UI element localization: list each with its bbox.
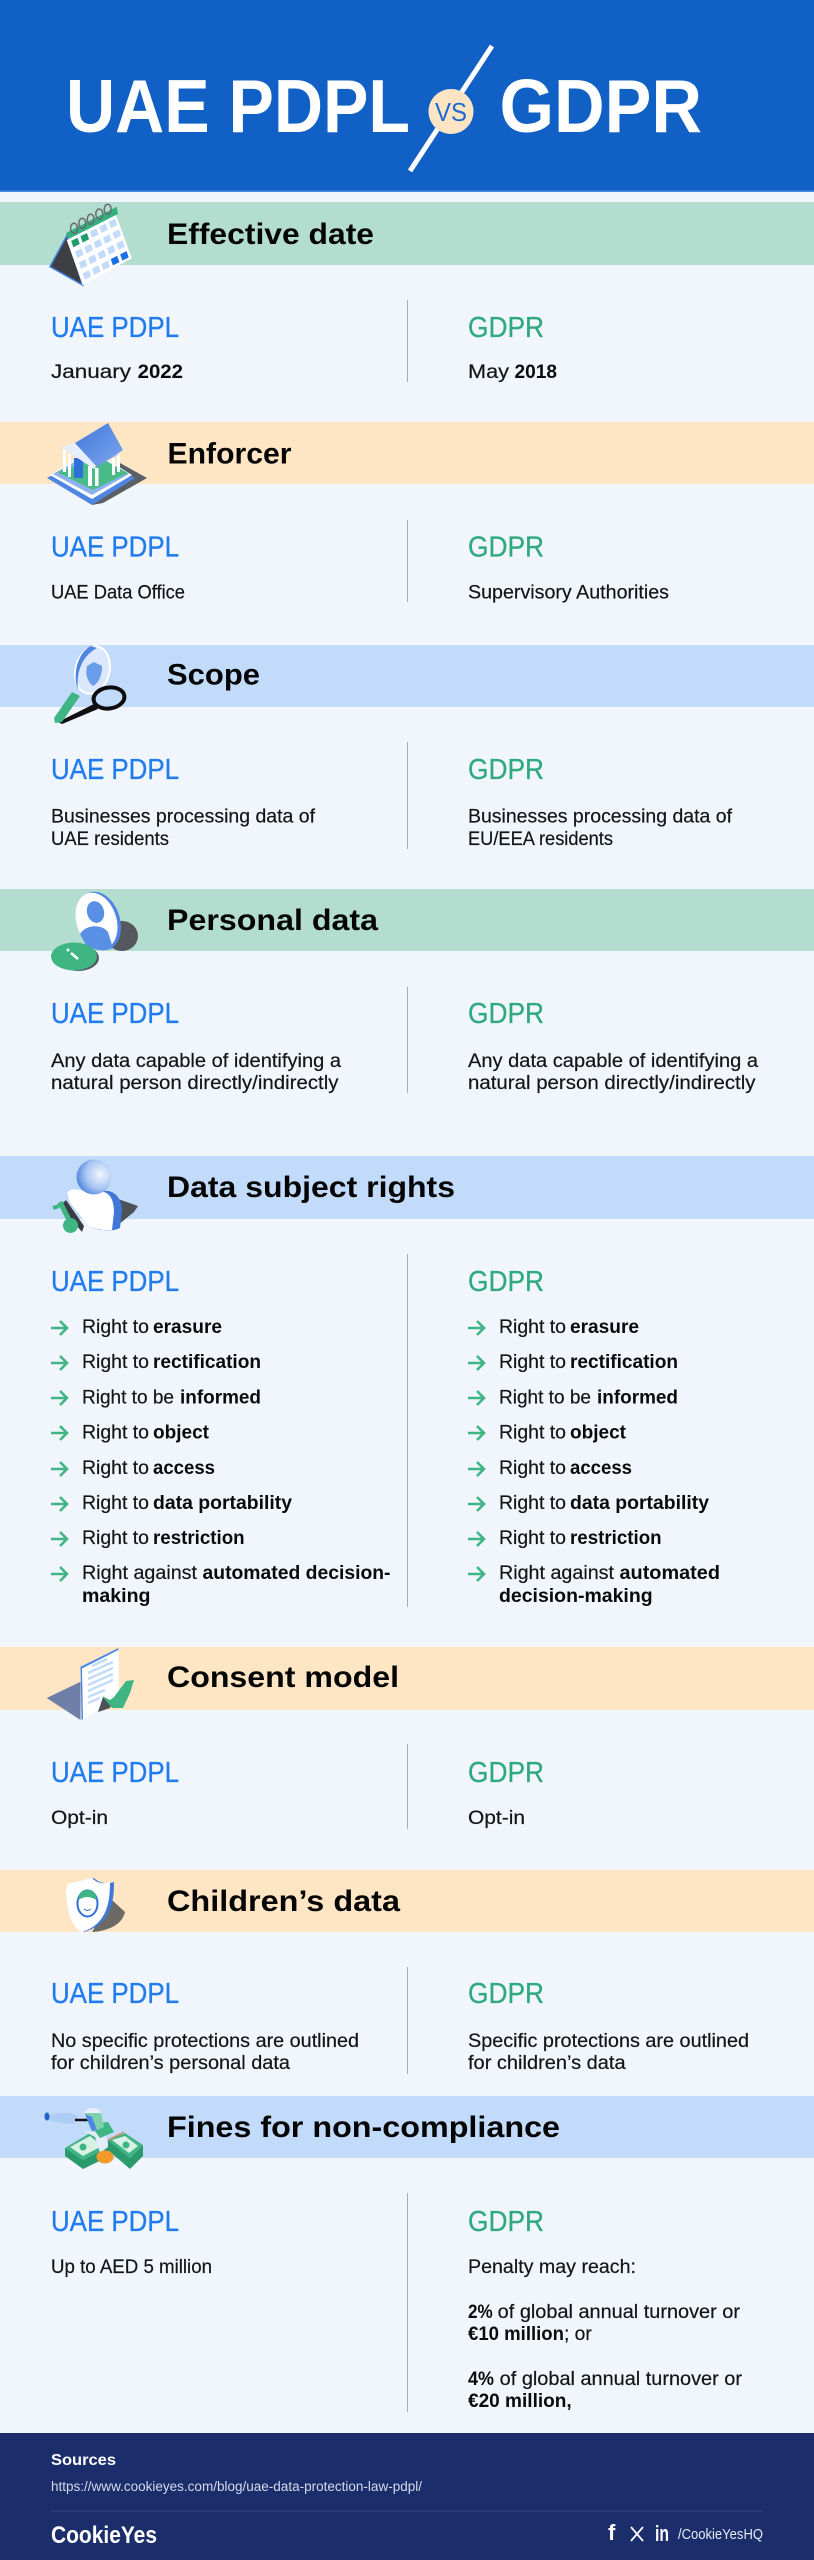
- column: UAE PDPL rights list: [51, 1266, 390, 1607]
- column: UAE PDPL: UAE PDPL: [51, 754, 179, 786]
- column: GDPR: GDPR: [468, 754, 544, 786]
- section heading: Consent model: [167, 1661, 399, 1694]
- column divider: [406, 1744, 408, 1829]
- social icons and handle: [608, 2520, 763, 2546]
- column: UAE PDPL: Opt-in: [51, 1808, 108, 1829]
- section heading: Personal data: [167, 904, 378, 937]
- column: GDPR: EU/EEA residents: [468, 829, 613, 850]
- column: GDPR: Opt-in: [468, 1808, 525, 1829]
- section heading: Fines for non-compliance: [167, 2111, 560, 2144]
- column: UAE PDPL: UAE PDPL: [51, 312, 179, 344]
- column: UAE PDPL: UAE PDPL: [51, 532, 179, 564]
- column: GDPR: 2%: [468, 2302, 493, 2323]
- column: GDPR: Supervisory Authorities: [468, 582, 669, 604]
- panel: fines for non-compliance: [0, 2096, 814, 2412]
- column divider: [406, 300, 408, 382]
- column: GDPR: [468, 312, 557, 383]
- column: UAE PDPL: [51, 532, 185, 604]
- heading band: [0, 889, 814, 951]
- section heading: Scope: [167, 658, 260, 692]
- column divider: [406, 2193, 408, 2412]
- column: GDPR: [468, 532, 669, 604]
- heading band: [0, 202, 814, 265]
- column: UAE PDPL rights list: data portability: [153, 1493, 292, 1514]
- column: GDPR rights list: access: [570, 1458, 632, 1479]
- column: GDPR: [468, 2206, 743, 2412]
- panel: data subject rights: [0, 1156, 814, 1607]
- heading band: [0, 2096, 814, 2158]
- title banner: [0, 0, 814, 192]
- section heading: Effective date: [167, 218, 374, 251]
- VS badge: VS: [435, 97, 467, 127]
- column divider: [406, 1254, 408, 1607]
- column: UAE PDPL: UAE PDPL: [51, 998, 179, 1030]
- column: UAE PDPL rights list: informed: [180, 1388, 261, 1408]
- panel: effective date: [0, 202, 814, 383]
- column: UAE PDPL: Businesses processing data of: [51, 806, 316, 828]
- sources heading: Sources: [51, 2452, 116, 2469]
- column: UAE PDPL: UAE PDPL: [51, 2206, 179, 2238]
- social icons and handle: /CookieYesHQ: [678, 2526, 763, 2543]
- column: UAE PDPL rights list: Right against: [82, 1563, 198, 1584]
- column: GDPR: 4%: [468, 2369, 494, 2390]
- column: GDPR rights list: automated: [620, 1563, 720, 1584]
- icon: government building: [47, 423, 147, 505]
- column: UAE PDPL: [51, 998, 341, 1094]
- column: GDPR: GDPR: [468, 2206, 544, 2238]
- column: UAE PDPL rights list: rectification: [153, 1352, 261, 1373]
- column: UAE PDPL rights list: Right to: [82, 1317, 149, 1338]
- column: UAE PDPL: 2022: [138, 362, 183, 383]
- icon: document with checkmark: [47, 1648, 134, 1720]
- column: GDPR rights list: Right to: [499, 1493, 566, 1514]
- footer: [0, 2433, 814, 2560]
- column: GDPR rights list: Right against: [499, 1563, 615, 1584]
- icon: child on shield: [66, 1878, 125, 1932]
- column: UAE PDPL: [51, 754, 316, 850]
- column: UAE PDPL rights list: access: [153, 1458, 215, 1479]
- CookieYes logo: CookieYes: [51, 2522, 157, 2549]
- section heading: Children’s data: [167, 1885, 400, 1918]
- column: UAE PDPL rights list: restriction: [153, 1528, 245, 1549]
- social icons and handle: in: [655, 2521, 669, 2546]
- heading band: [0, 1156, 814, 1219]
- column: UAE PDPL rights list: Right to: [82, 1528, 149, 1549]
- column: GDPR: ; or: [564, 2324, 592, 2345]
- column: GDPR rights list: Right to: [499, 1422, 566, 1444]
- column divider: [406, 986, 408, 1093]
- column: GDPR: [468, 1757, 544, 1829]
- column: GDPR: GDPR: [468, 998, 544, 1030]
- column: UAE PDPL: [51, 2206, 212, 2278]
- column: UAE PDPL rights list: erasure: [153, 1317, 222, 1338]
- icon: person with key: [53, 1160, 138, 1233]
- column: UAE PDPL: UAE PDPL: [51, 1978, 179, 2010]
- source link: https://www.cookieyes.com/blog/uae-data-protection-law-pdpl/: [51, 2479, 422, 2494]
- column: GDPR: natural person directly/indirectly: [468, 1073, 756, 1094]
- icon: profile badge with info button: [51, 886, 138, 971]
- column: UAE PDPL rights list: Right to: [82, 1458, 149, 1479]
- column: GDPR: [468, 754, 733, 850]
- icon: calendar: [50, 204, 132, 285]
- column: UAE PDPL rights list: Right to: [82, 1352, 149, 1373]
- column: GDPR rights list: Right to be: [499, 1388, 591, 1408]
- column divider: [406, 742, 408, 849]
- section heading: Enforcer: [168, 438, 292, 470]
- column: GDPR rights list: Right to: [499, 1458, 566, 1479]
- column: GDPR: Businesses processing data of: [468, 806, 733, 828]
- column: UAE PDPL: Up to AED 5 million: [51, 2257, 212, 2278]
- column: UAE PDPL: UAE residents: [51, 829, 169, 850]
- column: GDPR rights list: decision-making: [499, 1586, 653, 1607]
- column: GDPR rights list: rectification: [570, 1352, 678, 1373]
- column: UAE PDPL: for children’s personal data: [51, 2053, 290, 2074]
- column: GDPR: May: [468, 362, 510, 383]
- panel: enforcer: [0, 422, 814, 604]
- column: GDPR: of global annual turnover or: [498, 2302, 741, 2323]
- column: UAE PDPL rights list: automated decision-: [202, 1563, 390, 1584]
- icon: magnifier with shield: [54, 643, 126, 724]
- column: UAE PDPL rights list: object: [153, 1422, 210, 1444]
- column: GDPR: GDPR: [468, 1978, 544, 2010]
- column: GDPR rights list: Right to: [499, 1317, 566, 1338]
- column: GDPR rights list: restriction: [570, 1528, 662, 1549]
- column: UAE PDPL: [51, 312, 183, 383]
- panel: consent model: [0, 1647, 814, 1829]
- column divider: [406, 520, 408, 602]
- column: UAE PDPL rights list: making: [82, 1586, 150, 1607]
- column: UAE PDPL: [51, 1757, 179, 1829]
- column: GDPR rights list: data portability: [570, 1493, 709, 1514]
- column: UAE PDPL: January: [51, 362, 132, 383]
- column: GDPR: Any data capable of identifying a: [468, 1051, 758, 1072]
- column: GDPR: 2018: [514, 362, 557, 383]
- title left: UAE PDPL: UAE PDPL: [66, 64, 410, 148]
- column: UAE PDPL rights list: Right to: [82, 1422, 149, 1444]
- column: GDPR rights list: GDPR: [468, 1266, 544, 1298]
- column: GDPR: €10 million: [468, 2324, 564, 2345]
- social icons and handle: f: [608, 2520, 616, 2545]
- column: GDPR rights list: Right to: [499, 1352, 566, 1373]
- section heading: Data subject rights: [167, 1171, 455, 1204]
- column: UAE PDPL rights list: UAE PDPL: [51, 1266, 179, 1298]
- heading band: [0, 1870, 814, 1932]
- heading band: [0, 1647, 814, 1710]
- column: UAE PDPL: [51, 1978, 359, 2074]
- column: GDPR: Penalty may reach:: [468, 2257, 636, 2278]
- column: GDPR: GDPR: [468, 1757, 544, 1789]
- column: GDPR: Specific protections are outlined: [468, 2031, 749, 2052]
- column: GDPR rights list: object: [570, 1422, 627, 1444]
- icon: gavel over cash stacks: [44, 2108, 143, 2169]
- heading band: [0, 422, 814, 484]
- panel: children's data: [0, 1870, 814, 2074]
- column: GDPR: GDPR: [468, 312, 544, 344]
- column: UAE PDPL: No specific protections are outlined: [51, 2031, 359, 2052]
- column: GDPR: [468, 998, 758, 1094]
- column: GDPR: for children’s data: [468, 2053, 626, 2074]
- column: GDPR rights list: [468, 1266, 720, 1607]
- column: UAE PDPL rights list: Right to be: [82, 1388, 174, 1408]
- column: UAE PDPL: UAE PDPL: [51, 1757, 179, 1789]
- panel: personal data: [0, 886, 814, 1094]
- column: GDPR rights list: informed: [597, 1388, 678, 1408]
- column: UAE PDPL: Any data capable of identifying a: [51, 1051, 341, 1072]
- heading band: [0, 645, 814, 707]
- column: UAE PDPL: natural person directly/indirectly: [51, 1073, 339, 1094]
- column: GDPR: GDPR: [468, 532, 544, 564]
- slash divider: [410, 46, 492, 171]
- column: GDPR: [468, 1978, 749, 2074]
- column: GDPR rights list: Right to: [499, 1528, 566, 1549]
- VS badge: [428, 89, 474, 134]
- column divider: [406, 1967, 408, 2074]
- column: UAE PDPL: UAE Data Office: [51, 582, 185, 604]
- column: GDPR: €20 million,: [468, 2391, 572, 2412]
- column: UAE PDPL rights list: Right to: [82, 1493, 149, 1514]
- title right: GDPR: GDPR: [500, 64, 702, 148]
- panel: scope: [0, 643, 814, 850]
- column: GDPR: of global annual turnover or: [500, 2369, 743, 2390]
- column: GDPR rights list: erasure: [570, 1317, 639, 1338]
